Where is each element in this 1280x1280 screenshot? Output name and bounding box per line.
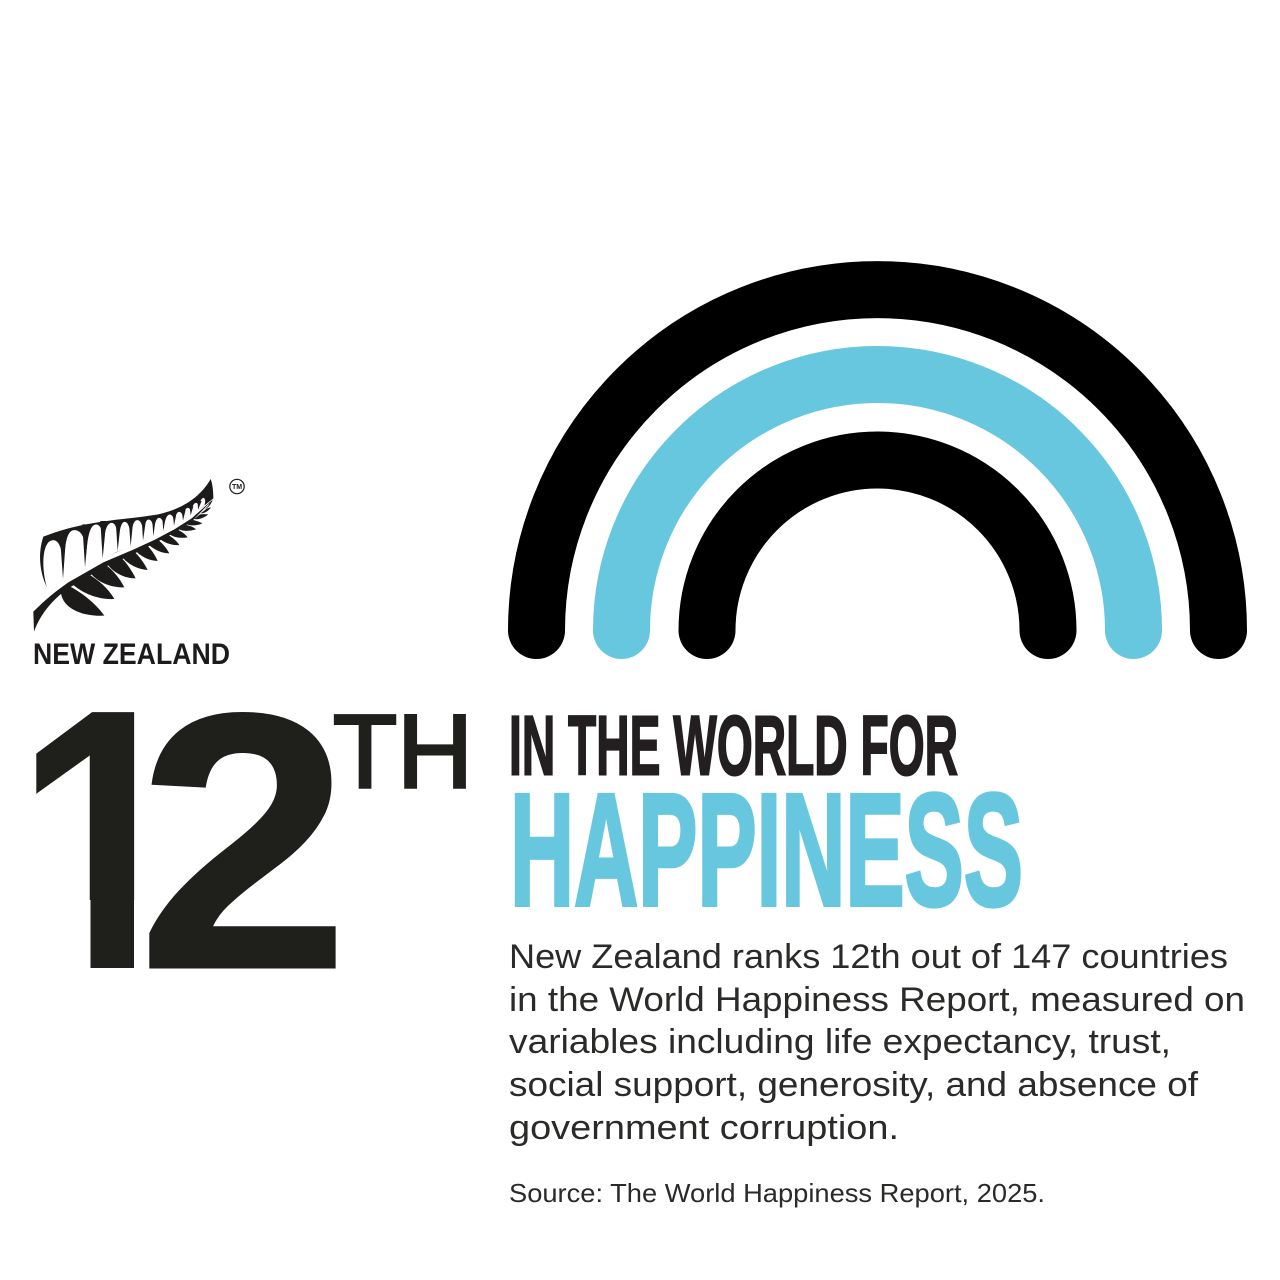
- body paragraph: variables including life expectancy, trust,: [509, 1023, 1171, 1061]
- rainbow arcs graphic: [536, 290, 1218, 630]
- body paragraph: social support, generosity, and absence of: [509, 1066, 1198, 1104]
- icon: trademark: [230, 479, 244, 494]
- body paragraph: in the World Happiness Report, measured on: [509, 981, 1245, 1019]
- body paragraph: [509, 938, 1245, 1147]
- superscript TH: TH: [333, 694, 473, 810]
- outer black arc: [536, 290, 1218, 630]
- body paragraph: government corruption.: [509, 1109, 899, 1147]
- icon: trademark: TM: [232, 484, 242, 491]
- inner black arc: [707, 460, 1048, 630]
- body paragraph: New Zealand ranks 12th out of 147 countries: [509, 938, 1228, 976]
- digit 2: 2: [136, 637, 350, 1046]
- big rank number: [5, 631, 473, 1047]
- logo wordmark: NEW ZEALAND: [33, 638, 230, 671]
- New Zealand fern logo: [33, 479, 244, 671]
- icon: silver fern: [33, 479, 213, 632]
- digit 1: 1: [14, 631, 194, 1047]
- middle blue arc: [622, 374, 1134, 630]
- source note: Source: The World Happiness Report, 2025.: [509, 1178, 1045, 1208]
